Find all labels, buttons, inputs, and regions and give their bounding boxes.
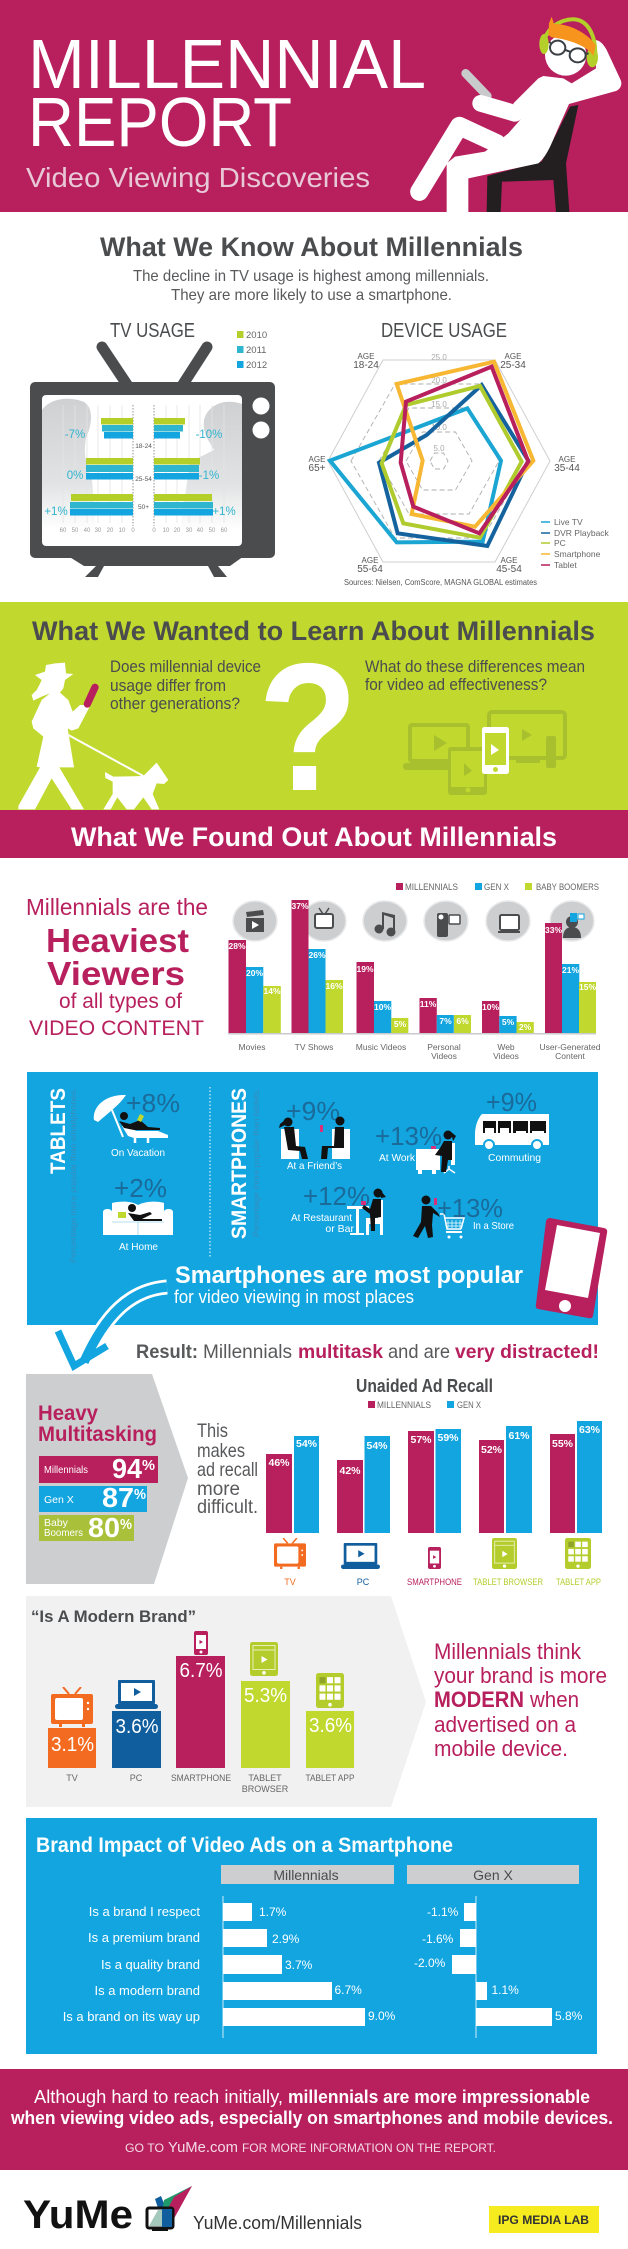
column header: millennials: Millennials — [273, 1867, 339, 1883]
item: commuting: +9% — [486, 1087, 537, 1117]
bars: user-generated content: 21% — [562, 965, 579, 975]
device labels: PC — [357, 1577, 370, 1587]
bars: tv: 54% — [296, 1438, 318, 1450]
row labels: Is a modern brand — [94, 1983, 200, 1998]
item: at restaurant or bar: +12% — [303, 1181, 370, 1211]
call to action — [125, 2139, 496, 2156]
item: commuting — [475, 1087, 549, 1164]
category labels: Videos — [431, 1051, 457, 1061]
device labels: TABLET BROWSER — [473, 1577, 543, 1587]
title: Millennial Report: REPORT — [28, 83, 292, 161]
heading: What We Wanted to Learn About Millennials — [32, 616, 595, 646]
legend: generations: BABY BOOMERS — [536, 882, 599, 892]
axis ticks: 0 — [131, 528, 135, 534]
percent changes: +1% — [212, 506, 236, 518]
icon: seated millennial with headphones and phone — [419, 17, 621, 212]
bar: millennials 94%: % — [142, 1457, 155, 1474]
item: in a store — [413, 1193, 514, 1238]
bar: baby boomers 80%: Boomers — [44, 1527, 83, 1539]
bars: user-generated content: 33% — [545, 925, 562, 935]
age labels: AGE — [501, 556, 517, 565]
silhouettes of viewers — [42, 399, 242, 530]
device labels — [284, 1577, 601, 1587]
heading: smartphones: SMARTPHONES — [228, 1088, 251, 1239]
legend: MILLENNIALS — [377, 1400, 431, 1410]
scale labels: 15.0 — [431, 400, 447, 409]
text: this makes ad recall more difficult: This — [197, 1420, 228, 1442]
percent changes: -1% — [199, 470, 219, 482]
row labels: Is a brand I respect — [89, 1904, 200, 1919]
row labels — [63, 1904, 200, 2024]
item: at a friend's — [279, 1096, 350, 1172]
bars: movies: 28% — [228, 941, 246, 951]
age labels: 18-24 — [353, 360, 379, 371]
item: at restaurant or bar — [291, 1181, 386, 1235]
text: millennials think brand is more modern: advertised on a — [434, 1712, 576, 1737]
bars: user-generated content — [545, 923, 596, 1033]
bars: 18-24 — [101, 418, 185, 438]
age labels: 25-34 — [500, 360, 526, 371]
bars: smartphone: 57% — [410, 1434, 432, 1446]
bar labels: PC — [130, 1773, 143, 1783]
bars: music videos — [356, 962, 408, 1033]
text block: heaviest viewers: VIDEO CONTENT — [29, 1017, 204, 1040]
bars: smartphone — [408, 1429, 461, 1533]
legend: DVR Playback — [554, 528, 610, 538]
bars: web videos: 10% — [482, 1002, 499, 1012]
bars: tablet app: 63% — [579, 1424, 601, 1436]
chart: viewers by video content type — [228, 900, 601, 1061]
legend: tv usage years — [237, 330, 267, 371]
logo: YuMe: YuMe — [23, 2193, 133, 2237]
bar: tablet browser — [241, 1642, 290, 1768]
axis ticks: 50 — [72, 528, 79, 534]
heading: tablets — [47, 1088, 78, 1263]
bars: pc — [337, 1436, 390, 1533]
section: what we know about millennials — [100, 232, 523, 304]
bar: pc: 3.6% — [116, 1716, 159, 1738]
bars: tablet app — [550, 1421, 602, 1533]
bars: web videos: 5% — [502, 1017, 515, 1027]
question one: other generations? — [110, 695, 240, 713]
heading: Multitasking — [38, 1423, 157, 1446]
row labels: Is a premium brand — [88, 1930, 200, 1945]
bar labels: TV — [66, 1773, 78, 1783]
category labels: User-Generated — [540, 1042, 601, 1052]
row labels: Is a quality brand — [101, 1957, 200, 1972]
bar: gen x 87%: % — [134, 1486, 146, 1503]
axis ticks — [60, 528, 228, 534]
age labels: 55-64 — [357, 564, 383, 575]
category labels: Personal — [427, 1042, 461, 1052]
data lines — [330, 362, 533, 546]
bars: millennials: 1.7% — [259, 1905, 287, 1919]
device icons — [274, 1538, 591, 1569]
bars: personal videos: 6% — [456, 1016, 469, 1026]
bar: baby boomers 80%: % — [120, 1516, 132, 1533]
bars: web videos — [482, 1001, 534, 1033]
text: this makes ad recall more difficult: ad recall — [197, 1459, 258, 1481]
bar labels: SMARTPHONE — [171, 1773, 231, 1783]
item: at home: +2% — [114, 1173, 167, 1203]
question two — [365, 658, 585, 694]
bars: millennials — [223, 1903, 396, 2026]
age labels: AGE — [362, 556, 378, 565]
age labels: 65+ — [309, 463, 326, 474]
legend: tv usage years: 2012 — [246, 360, 267, 371]
scale labels: 20.0 — [431, 376, 447, 385]
bar: tablet app: 3.6% — [309, 1715, 352, 1737]
heading: What We Know About Millennials — [100, 232, 523, 262]
heading: device usage: DEVICE USAGE — [381, 320, 507, 342]
percent changes: -10% — [196, 429, 222, 441]
bars: gen x: 1.1% — [492, 1983, 519, 1997]
bars: tv: 46% — [268, 1457, 290, 1469]
bars: web videos: 2% — [519, 1022, 532, 1032]
legend: generations: GEN X — [484, 882, 509, 892]
legend — [541, 517, 610, 570]
bar: millennials 94%: Millennials — [44, 1464, 88, 1476]
axis ticks: 10 — [163, 528, 170, 534]
bars: gen x: -2.0% — [414, 1956, 446, 1970]
item: in a store: In a Store — [473, 1220, 514, 1232]
icon: tilted smartphone — [536, 1218, 607, 1318]
heading: Heavy — [38, 1402, 98, 1425]
text: this makes ad recall more difficult: makes — [197, 1440, 245, 1462]
text: millennials think brand is more modern — [434, 1639, 607, 1761]
intro text: They are more likely to use a smartphone. — [171, 287, 452, 304]
heading: smartphones: Percentage more popular than tablets. — [251, 1088, 261, 1237]
item: commuting: Commuting — [488, 1152, 541, 1164]
column header: millennials — [221, 1865, 394, 1884]
legend: generations — [396, 882, 599, 892]
bars: personal videos — [420, 998, 471, 1033]
axis ticks: 50 — [209, 528, 216, 534]
legend: Live TV — [554, 517, 583, 527]
item: at a friend's: At a Friend’s — [287, 1160, 342, 1172]
text: result statement: multitask — [298, 1341, 383, 1363]
text: this makes ad recall more difficult — [197, 1420, 258, 1518]
chart: device usage radar — [309, 352, 610, 575]
bars: movies: 14% — [263, 986, 281, 996]
text: result statement — [136, 1341, 599, 1363]
link text: YuMe.com/Millennials — [193, 2213, 362, 2233]
age labels — [135, 443, 152, 511]
question two: What do these differences mean — [365, 658, 585, 676]
conclusion text: when viewing video ads, especially on smartphones and mobile devices. — [10, 2108, 613, 2128]
scale labels: 25.0 — [431, 353, 447, 362]
percent changes — [44, 429, 236, 518]
panel: what we wanted to learn — [0, 602, 628, 829]
age labels — [309, 352, 580, 575]
text: millennials think brand is more modern: your brand is more — [434, 1663, 607, 1688]
bars: personal videos: 11% — [420, 999, 437, 1009]
item: at restaurant or bar: At Restaurant — [291, 1212, 352, 1224]
legend — [368, 1400, 481, 1410]
category icons — [233, 901, 594, 941]
axis ticks: 30 — [186, 528, 193, 534]
bars: tv — [266, 1436, 319, 1533]
axis ticks: 20 — [107, 528, 114, 534]
bars: tv shows: 37% — [291, 901, 309, 911]
age labels: 45-54 — [496, 564, 522, 575]
text block: heaviest viewers: Heaviest — [46, 922, 189, 959]
item: at a friend's: +9% — [286, 1096, 340, 1126]
text: this makes ad recall more difficult: more — [197, 1478, 240, 1500]
question one — [110, 658, 261, 713]
bars: tv shows: 26% — [308, 950, 326, 960]
category labels: Videos — [493, 1051, 519, 1061]
icon: woman walking dog — [18, 663, 168, 809]
category labels — [239, 1042, 601, 1061]
callout: smartphones most popular: for video viewing in most places — [174, 1287, 414, 1307]
row labels: Is a brand on its way up — [63, 2009, 200, 2024]
text: millennials think brand is more modern: Millennials think — [434, 1639, 582, 1664]
axis ticks: 10 — [119, 528, 126, 534]
text block: heaviest viewers: of all types of — [59, 990, 182, 1013]
device labels: TABLET APP — [556, 1577, 601, 1587]
question two: for video ad effectiveness? — [365, 676, 547, 694]
category labels: Web — [497, 1042, 515, 1052]
bars: millennials: 3.7% — [285, 1958, 313, 1972]
call to action: FOR MORE INFORMATION ON THE REPORT. — [242, 2141, 496, 2155]
heading: smartphones — [228, 1088, 261, 1239]
callout: smartphones most popular — [174, 1262, 523, 1307]
text: this makes ad recall more difficult: difficult. — [197, 1496, 258, 1518]
bar: pc — [112, 1680, 161, 1768]
axis ticks: 40 — [84, 528, 91, 534]
percent changes: +1% — [44, 506, 68, 518]
item: at home — [103, 1173, 173, 1253]
age labels: AGE — [309, 455, 325, 464]
item: at work: +13% — [375, 1121, 442, 1151]
bars: gen x: 5.8% — [555, 2009, 583, 2023]
bars: movies: 20% — [246, 968, 263, 978]
text: millennials think brand is more modern: when — [529, 1687, 579, 1712]
bar: smartphone: 6.7% — [180, 1660, 223, 1682]
bar labels: TABLET APP — [306, 1773, 354, 1783]
bar: gen x 87%: Gen X — [44, 1494, 74, 1506]
scale labels: 10.0 — [431, 423, 447, 432]
axis ticks: 60 — [221, 528, 228, 534]
text: result statement: very distracted! — [455, 1341, 599, 1363]
axis ticks: 20 — [174, 528, 181, 534]
panel: brand impact of video ads on a smartphone — [26, 1818, 597, 2054]
item: at work — [375, 1121, 456, 1174]
device labels: TV — [284, 1577, 296, 1587]
call to action: YuMe.com — [168, 2139, 238, 2156]
intro text — [133, 268, 489, 304]
heading: tablets: TABLETS — [47, 1088, 70, 1174]
bars: 50+ — [70, 494, 213, 516]
bars: smartphone: 59% — [437, 1432, 459, 1444]
bar: tablet app — [306, 1673, 354, 1768]
subtitle: Video Viewing Discoveries — [26, 162, 370, 193]
bars: gen x — [414, 1903, 583, 2026]
heading — [38, 1402, 157, 1446]
text: result statement: Millennials — [203, 1341, 292, 1363]
bars: music videos: 19% — [356, 964, 374, 974]
age labels: 25-54 — [135, 476, 152, 483]
bar labels — [66, 1773, 354, 1794]
bar labels: BROWSER — [242, 1784, 289, 1794]
bars: music videos: 5% — [394, 1019, 407, 1029]
bar: millennials 94% — [39, 1453, 158, 1484]
text: millennials think brand is more modern: mobile device. — [434, 1736, 568, 1761]
category labels: Movies — [239, 1042, 265, 1052]
bar labels: TABLET — [248, 1773, 282, 1783]
panel: is a modern brand — [26, 1596, 426, 1807]
text: result statement: and are — [388, 1341, 450, 1363]
age labels: AGE — [505, 352, 521, 361]
axis ticks: 60 — [60, 528, 67, 534]
category labels: Content — [555, 1051, 586, 1061]
panel: header banner — [0, 0, 628, 212]
category labels: Music Videos — [356, 1042, 406, 1052]
device labels: SMARTPHONE — [407, 1577, 462, 1587]
legend: tv usage years: 2010 — [246, 330, 267, 341]
grid lines — [63, 405, 224, 523]
icon: YuMe tv check — [147, 2186, 192, 2230]
chart title: Unaided Ad Recall — [356, 1376, 493, 1396]
heading: tablets: Percentage more popular than smartphones. — [68, 1088, 78, 1263]
bar: gen x 87% — [39, 1482, 147, 1513]
age labels: 18-24 — [135, 443, 152, 450]
bars: tablet browser: 52% — [481, 1444, 503, 1456]
bars: pc: 54% — [366, 1440, 388, 1452]
chart: unaided ad recall — [266, 1376, 602, 1587]
text: millennials think brand is more modern: MODERN — [434, 1687, 524, 1712]
item: on vacation: +8% — [126, 1088, 180, 1118]
panel: conclusion banner — [0, 2069, 628, 2170]
title: Millennial Report — [28, 25, 426, 161]
bars: millennials: 6.7% — [334, 1983, 362, 1997]
bars: tv shows — [291, 900, 343, 1033]
column header: gen x — [407, 1865, 579, 1884]
call to action: GO TO — [125, 2141, 164, 2155]
bars: pc: 42% — [339, 1465, 361, 1477]
text: result statement: Result: — [136, 1341, 198, 1363]
panel: what we found out heading band: What We Found Out About Millennials — [71, 822, 557, 852]
question one: usage differ from — [110, 677, 226, 695]
conclusion text: millennials are more impressionable — [288, 2087, 590, 2107]
bars: gen x: -1.1% — [427, 1905, 459, 1919]
item: on vacation — [94, 1088, 180, 1159]
bars: millennials: 2.9% — [272, 1932, 300, 1946]
icon: video devices — [403, 712, 565, 795]
legend: Tablet — [554, 560, 577, 570]
bars: music videos: 10% — [374, 1002, 391, 1012]
title: Millennial Report: MILLENNIAL — [28, 25, 426, 103]
age labels: 35-44 — [554, 463, 580, 474]
heading: “Is A Modern Brand” — [31, 1607, 196, 1626]
bars: gen x: -1.6% — [422, 1932, 454, 1946]
item: at work: At Work — [379, 1152, 416, 1164]
item: in a store: +13% — [437, 1193, 503, 1223]
percent changes: 0% — [67, 470, 83, 482]
age labels: 50+ — [138, 504, 149, 511]
category labels: TV Shows — [295, 1042, 333, 1052]
conclusion text: Although hard to reach initially, — [34, 2087, 283, 2107]
percent changes: -7% — [65, 429, 85, 441]
logo: YuMe — [23, 2186, 192, 2237]
arrow: down to result — [58, 1287, 167, 1366]
text block: heaviest viewers — [26, 894, 208, 1040]
bars: 25-54 — [86, 458, 200, 480]
panel: tablets and smartphones by location — [27, 1072, 607, 1325]
item: at home: At Home — [119, 1241, 158, 1253]
bars: tablet browser — [479, 1426, 532, 1533]
item: on vacation: On Vacation — [111, 1147, 165, 1159]
icon: question mark: ? — [258, 625, 358, 829]
bar: baby boomers 80% — [39, 1512, 134, 1543]
legend: generations: MILLENNIALS — [405, 882, 458, 892]
axis ticks: 0 — [152, 528, 156, 534]
callout: smartphones most popular: Smartphones are most popular — [175, 1262, 523, 1289]
axis ticks: 30 — [95, 528, 102, 534]
bars: personal videos: 7% — [439, 1016, 452, 1026]
bars: tablet browser: 61% — [508, 1430, 530, 1442]
question one: Does millennial device — [110, 658, 261, 676]
scale labels: 5.0 — [433, 444, 445, 453]
bar: gen x 87%: 87 — [102, 1482, 134, 1513]
logo: IPG Media Lab — [489, 2206, 599, 2233]
bars: tablet app: 55% — [552, 1438, 574, 1450]
bar: smartphone — [176, 1631, 225, 1768]
legend: PC — [554, 538, 566, 548]
bar: tablet browser: 5.3% — [244, 1685, 287, 1707]
legend: GEN X — [457, 1400, 481, 1410]
age labels: AGE — [358, 352, 374, 361]
age labels: AGE — [559, 455, 575, 464]
column header: gen x: Gen X — [473, 1867, 514, 1883]
scale labels — [431, 353, 447, 453]
panel: heavy multitasking — [26, 1374, 188, 1584]
conclusion text — [10, 2087, 613, 2128]
heading: Brand Impact of Video Ads on a Smartphone — [36, 1833, 453, 1857]
intro text: The decline in TV usage is highest among millennials. — [133, 268, 489, 285]
bars: millennials: 9.0% — [368, 2009, 396, 2023]
axis ticks: 40 — [197, 528, 204, 534]
panel: what we found out heading band — [0, 810, 628, 858]
bars: user-generated content: 15% — [579, 982, 596, 992]
bar: baby boomers 80%: 80 — [88, 1512, 120, 1543]
bar: millennials 94%: 94 — [112, 1453, 142, 1484]
bars: movies — [228, 940, 281, 1033]
item: at restaurant or bar: or Bar — [325, 1223, 355, 1235]
bar: tv — [48, 1687, 96, 1768]
chart: television with age bars — [30, 347, 275, 577]
logo: IPG Media Lab: IPG MEDIA LAB — [498, 2215, 589, 2227]
heading: tv usage: TV USAGE — [110, 320, 195, 342]
legend: tv usage years: 2011 — [246, 345, 266, 356]
source note: Sources: Nielsen, ComScore, MAGNA GLOBAL estimates — [344, 578, 537, 587]
bars: tv shows: 16% — [325, 981, 343, 991]
text block: heaviest viewers: Millennials are the — [26, 894, 208, 920]
legend: Smartphone — [554, 549, 601, 559]
bar: tv: 3.1% — [51, 1734, 94, 1756]
text block: heaviest viewers: Viewers — [47, 955, 185, 992]
bar: baby boomers 80%: Baby — [44, 1517, 69, 1529]
